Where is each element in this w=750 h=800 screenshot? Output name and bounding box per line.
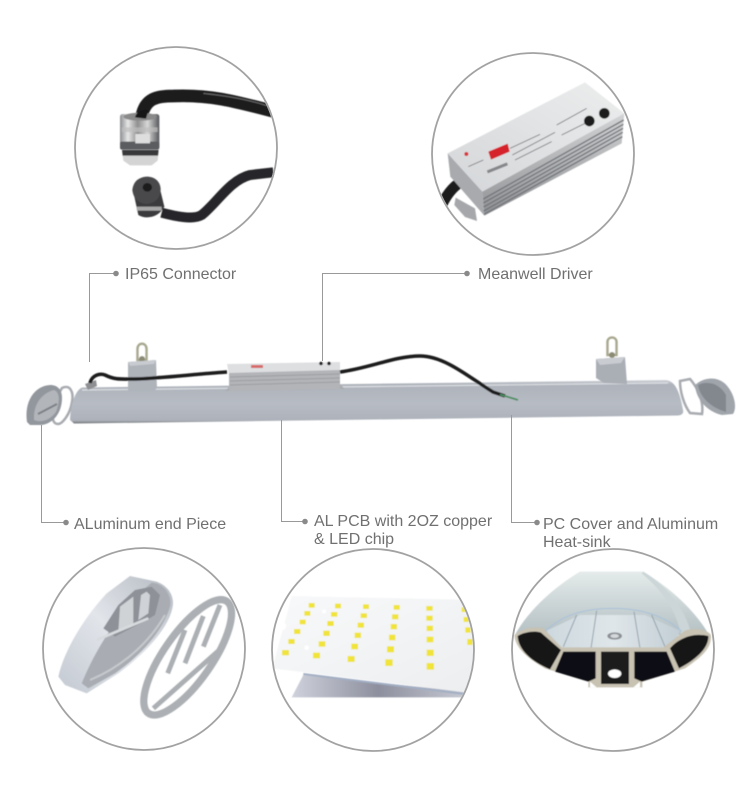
circle outline — [43, 548, 245, 750]
heat-sink photo — [514, 572, 711, 687]
label: ALuminum end Piece — [42, 425, 226, 533]
left hanger bracket — [128, 344, 157, 391]
label: Meanwell Driver — [322, 266, 593, 361]
cable left — [90, 372, 227, 383]
right end piece — [680, 378, 735, 415]
body — [70, 380, 683, 424]
cable right — [340, 356, 505, 396]
label: AL PCB with 2OZ copper and LED chip: & LED chip — [314, 531, 394, 548]
driver photo — [442, 82, 624, 221]
label: AL PCB with 2OZ copper and LED chip — [282, 420, 493, 548]
circle outline — [272, 549, 474, 751]
driver — [225, 362, 345, 391]
label: PC Cover and Aluminum Heat-sink — [512, 415, 718, 551]
label: ALuminum end Piece: ALuminum end Piece — [74, 516, 226, 533]
small gland — [85, 380, 97, 390]
product: linear light fixture — [26, 338, 735, 425]
circle outline — [75, 47, 277, 249]
label: IP65 Connector — [90, 266, 237, 362]
circle outline — [512, 549, 714, 751]
panel: heat-sink and PC cover detail — [512, 549, 714, 751]
label: PC Cover and Aluminum Heat-sink: Heat-sink — [543, 534, 612, 551]
label: PC Cover and Aluminum Heat-sink: PC Cover and Aluminum — [543, 516, 718, 533]
label: AL PCB with 2OZ copper and LED chip: AL PCB with 2OZ copper — [314, 513, 493, 530]
label: Meanwell Driver: Meanwell Driver — [478, 266, 593, 283]
panel: LED PCB detail — [272, 549, 478, 751]
panel: Meanwell driver detail — [432, 53, 634, 255]
circle outline — [432, 53, 634, 255]
panel: aluminum end piece detail — [43, 548, 247, 750]
end piece photo — [58, 576, 247, 727]
label: IP65 Connector: IP65 Connector — [125, 266, 237, 283]
panel: IP65 connector detail — [75, 47, 277, 249]
left end piece — [26, 385, 73, 425]
PCB photo — [272, 596, 478, 697]
connector photo — [120, 93, 273, 218]
right hanger bracket — [596, 338, 627, 384]
